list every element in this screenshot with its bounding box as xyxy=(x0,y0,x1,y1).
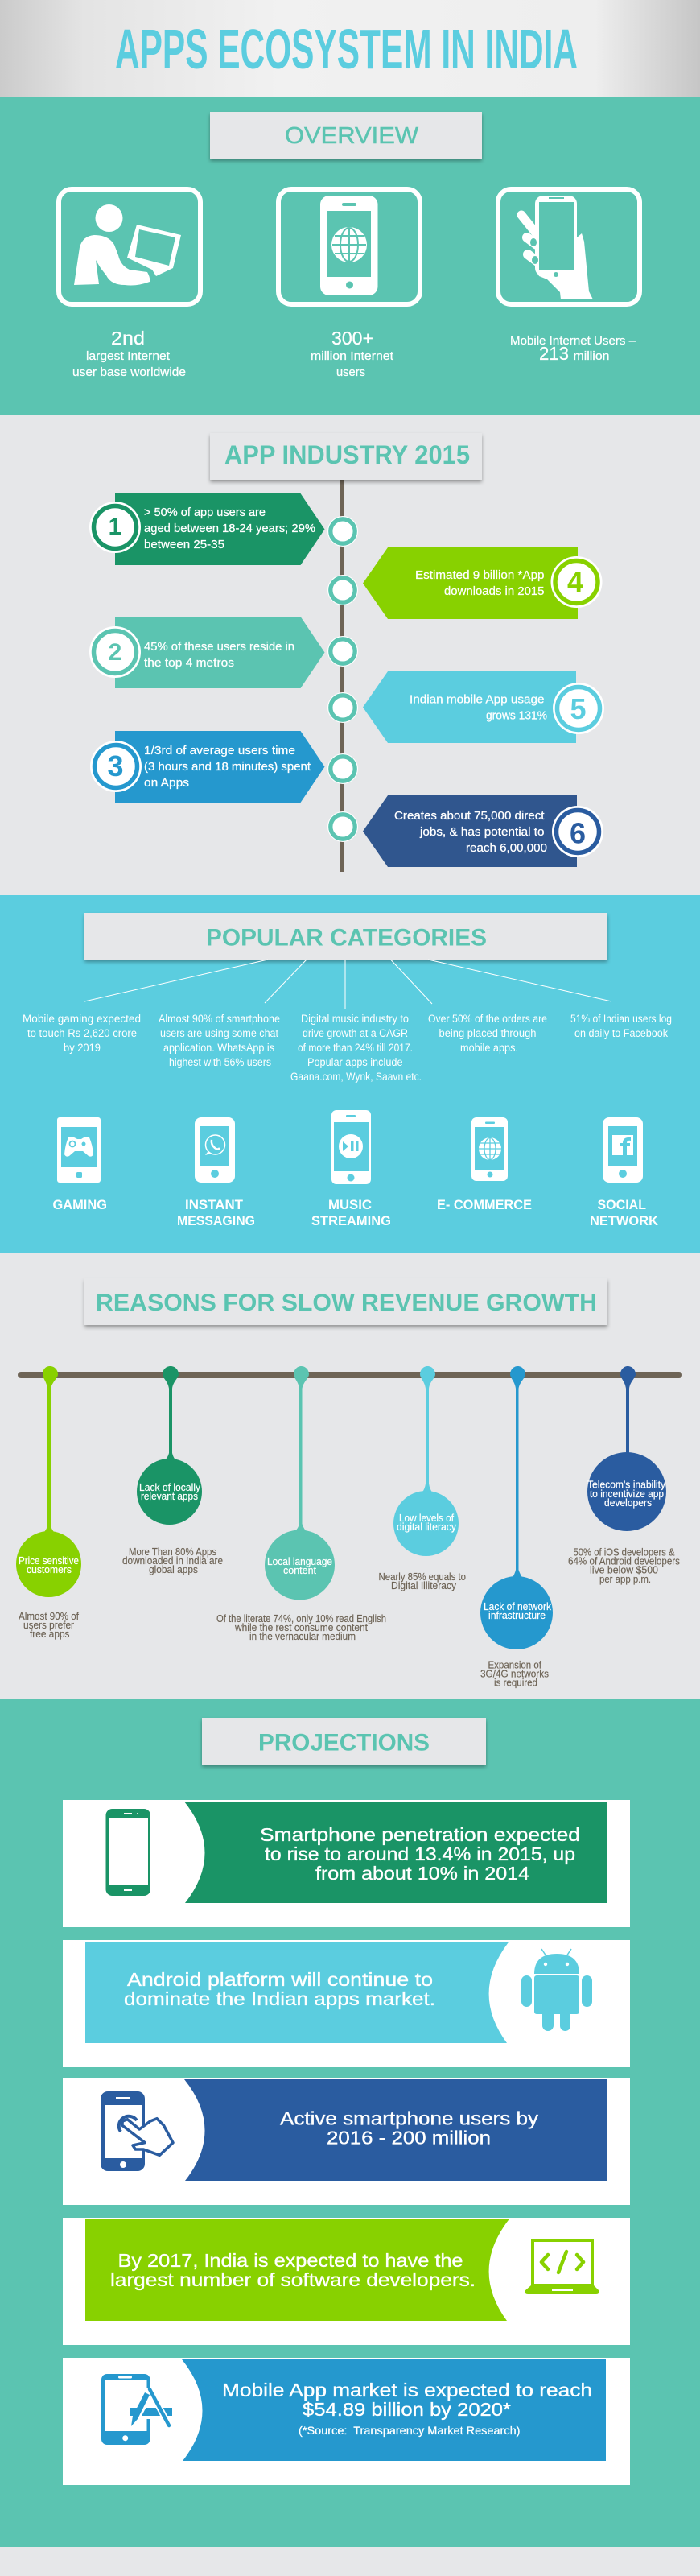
label: instant messaging: INSTANT xyxy=(185,1197,244,1212)
item 2: 2 xyxy=(109,639,121,666)
text: music fact: Gaana.com, Wynk, Saavn etc. xyxy=(290,1071,422,1083)
icon: e-commerce phone xyxy=(471,1117,508,1181)
label: music streaming: MUSIC xyxy=(328,1197,372,1212)
label: e-commerce: E- COMMERCE xyxy=(437,1197,532,1212)
text: 2nd largest xyxy=(72,328,186,379)
card: smartphone penetration: to rise to around 13.4% in 2015, up xyxy=(265,1843,575,1864)
card: smartphone penetration: from about 10% in 2014 xyxy=(315,1863,529,1884)
caption: Almost 90% of xyxy=(19,1611,79,1622)
item 1: between 25-35 xyxy=(144,538,224,551)
heading: overview: OVERVIEW xyxy=(285,123,419,149)
caption xyxy=(19,1611,79,1640)
text: social fact xyxy=(570,1013,672,1039)
card: active smartphone users: 2016 - 200 million xyxy=(327,2127,491,2148)
item 1: 1 xyxy=(109,514,121,540)
caption: More Than 80% Apps xyxy=(129,1546,216,1558)
text: 300+ million: users xyxy=(336,365,365,379)
text: commerce fact: Over 50% of the orders are xyxy=(428,1013,547,1025)
item 6: 6 xyxy=(570,816,586,850)
caption xyxy=(378,1571,466,1591)
text: mobile internet users: 213 xyxy=(539,343,569,364)
icon: person with laptop xyxy=(59,189,200,304)
label: gaming: GAMING xyxy=(53,1197,107,1212)
text: social fact: on daily to Facebook xyxy=(574,1027,668,1039)
card: smartphone penetration: Smartphone penetration expected xyxy=(260,1824,580,1845)
pin: telecom xyxy=(568,1366,680,1585)
caption xyxy=(480,1660,549,1689)
text: commerce fact: mobile apps. xyxy=(460,1042,518,1054)
text: gaming fact: by 2019 xyxy=(64,1042,101,1054)
label: social network xyxy=(590,1197,659,1228)
item 2: 45% of these users reside in xyxy=(144,640,294,654)
text: 2nd largest: user base worldwide xyxy=(72,365,186,379)
item 1: aged between 18-24 years; 29% xyxy=(144,522,315,535)
pin: telecom: Telecom's inability xyxy=(587,1480,666,1491)
pin: network infrastructure: Lack of network xyxy=(484,1601,552,1612)
caption xyxy=(216,1613,386,1642)
timeline spine xyxy=(340,480,344,872)
card: active smartphone users xyxy=(63,2078,630,2205)
text: music fact: drive growth at a CAGR xyxy=(303,1027,408,1039)
panel: reasons for slow revenue growth xyxy=(0,1253,700,1699)
heading: overview xyxy=(210,112,482,159)
text: messaging fact: users are using some chat xyxy=(160,1027,278,1039)
item 4 xyxy=(363,547,602,619)
pin: digital literacy: digital literacy xyxy=(397,1521,457,1533)
text: messaging fact: Almost 90% of smartphone xyxy=(159,1013,280,1025)
item 5: 5 xyxy=(570,692,587,725)
icon: app store on phone xyxy=(101,2374,172,2445)
item 4: Estimated 9 billion *App xyxy=(415,568,544,582)
card: mobile app market xyxy=(63,2358,630,2485)
caption: Expansion of xyxy=(488,1660,541,1671)
text: music fact xyxy=(290,1013,422,1083)
card: software developers: largest number of software developers. xyxy=(110,2269,476,2290)
pin: price sensitive: customers xyxy=(27,1564,72,1575)
heading: reasons: REASONS FOR SLOW REVENUE GROWTH xyxy=(96,1290,597,1316)
caption: free apps xyxy=(30,1629,69,1640)
card: smartphone penetration xyxy=(63,1800,630,1927)
pin: network infrastructure: infrastructure xyxy=(488,1610,546,1621)
text: commerce fact xyxy=(428,1013,547,1054)
card: android: Android platform will continue to xyxy=(127,1969,433,1990)
icon: gaming phone xyxy=(57,1117,101,1183)
item 5: Indian mobile App usage xyxy=(410,692,544,707)
text: gaming fact: to touch Rs 2,620 crore xyxy=(27,1027,137,1039)
pin: local language xyxy=(216,1366,386,1642)
horizontal bar xyxy=(18,1372,682,1378)
item 3: (3 hours and 18 minutes) spent xyxy=(144,760,311,774)
caption xyxy=(568,1547,680,1585)
item 5: grows 131% xyxy=(486,708,547,723)
card: android: dominate the Indian apps market. xyxy=(124,1988,435,2009)
text: commerce fact: being placed through xyxy=(439,1027,536,1039)
caption: 50% of iOS developers & xyxy=(573,1547,675,1558)
text: mobile internet users xyxy=(510,334,636,364)
card: active smartphone users: Active smartphone users by xyxy=(280,2107,539,2128)
icon: messaging phone xyxy=(195,1117,235,1183)
caption: downloaded in India are xyxy=(122,1555,223,1567)
timeline nodes xyxy=(327,516,358,842)
pin: telecom: to incentivize app xyxy=(590,1488,664,1500)
pin: digital literacy: Low levels of xyxy=(399,1513,454,1524)
caption: 64% of Android developers xyxy=(568,1555,680,1567)
panel: popular categories xyxy=(0,895,700,1253)
card: mobile app market: (*Source: Transparency Market Research) xyxy=(299,2424,520,2437)
caption: Nearly 85% equals to xyxy=(378,1571,466,1583)
icon: music phone xyxy=(331,1110,371,1184)
text: mobile internet users: Mobile Internet Users – xyxy=(510,334,636,348)
title band xyxy=(0,0,700,97)
pin: locally relevant: Lack of locally xyxy=(139,1482,201,1493)
text: gaming fact: Mobile gaming expected xyxy=(23,1013,141,1025)
caption: users prefer xyxy=(23,1620,74,1631)
heading: popular categories: POPULAR CATEGORIES xyxy=(206,924,487,952)
label: instant messaging xyxy=(177,1197,255,1228)
label: social network: NETWORK xyxy=(590,1213,659,1228)
caption: per app p.m. xyxy=(599,1574,651,1585)
icon: phone with globe xyxy=(278,189,420,304)
pin: telecom: developers xyxy=(604,1497,652,1509)
item 3: 3 xyxy=(107,749,124,782)
item 5 xyxy=(363,671,604,743)
icon: tapping hand on phone xyxy=(101,2091,173,2171)
item 1 xyxy=(89,493,325,565)
card: mobile app market: Mobile App market is expected to reach xyxy=(222,2380,592,2401)
text: 300+ million xyxy=(311,328,394,379)
pin: price sensitive xyxy=(16,1366,81,1640)
pin: price sensitive: Price sensitive xyxy=(19,1555,79,1567)
text: 300+ million: million Internet xyxy=(311,349,394,363)
icon: android xyxy=(521,1949,592,2031)
caption: in the vernacular medium xyxy=(249,1631,356,1642)
text: mobile internet users: million xyxy=(573,349,610,363)
icon: hand holding phone xyxy=(498,189,640,304)
connector lines xyxy=(84,960,611,1009)
caption xyxy=(122,1546,223,1575)
pin: network infrastructure xyxy=(480,1366,553,1689)
icon: social phone xyxy=(603,1117,643,1183)
panel: app industry 2015 xyxy=(0,415,700,895)
item 4: downloads in 2015 xyxy=(444,584,544,598)
text: messaging fact: highest with 56% users xyxy=(169,1056,271,1068)
text: 300+ million: 300+ xyxy=(331,328,373,349)
pin: locally relevant: relevant apps xyxy=(141,1491,198,1502)
label: instant messaging: MESSAGING xyxy=(177,1213,255,1228)
heading: app industry xyxy=(210,433,482,480)
caption: global apps xyxy=(149,1564,198,1575)
text: 2nd largest: 2nd xyxy=(111,328,145,349)
caption: live below $500 xyxy=(590,1565,658,1576)
card: software developers xyxy=(63,2218,630,2345)
caption: while the rest consume content xyxy=(234,1622,368,1633)
text: gaming fact xyxy=(23,1013,141,1054)
item 6 xyxy=(363,795,603,867)
text: messaging fact: application. WhatsApp is xyxy=(163,1042,274,1054)
item 3: 1/3rd of average users time xyxy=(144,744,295,758)
caption: is required xyxy=(494,1678,537,1689)
item 6: jobs, & has potential to xyxy=(419,825,544,839)
item 2: the top 4 metros xyxy=(144,656,234,670)
caption: Digital Illiteracy xyxy=(391,1580,457,1591)
pin: locally relevant xyxy=(122,1366,223,1575)
item 3: on Apps xyxy=(144,776,189,790)
item 2 xyxy=(89,617,325,688)
heading: reasons xyxy=(84,1278,607,1325)
label: music streaming xyxy=(311,1197,391,1228)
caption: 3G/4G networks xyxy=(480,1668,549,1679)
caption: Of the literate 74%, only 10% read English xyxy=(216,1613,386,1624)
label: social network: SOCIAL xyxy=(597,1197,646,1212)
card: mobile app market: $54.89 billion by 2020* xyxy=(303,2399,511,2420)
pin: digital literacy xyxy=(378,1366,466,1591)
heading: popular categories xyxy=(84,913,607,960)
panel: projections xyxy=(0,1699,700,2547)
item 1: > 50% of app users are xyxy=(144,506,266,519)
item 3 xyxy=(90,731,325,803)
item 6: Creates about 75,000 direct xyxy=(394,809,545,823)
text: messaging fact xyxy=(159,1013,280,1068)
text: music fact: Popular apps include xyxy=(307,1056,402,1068)
card: software developers: By 2017, India is expected to have the xyxy=(117,2250,463,2271)
heading: projections: PROJECTIONS xyxy=(258,1729,430,1757)
item 6: reach 6,00,000 xyxy=(466,841,547,855)
icon: laptop with code xyxy=(525,2240,599,2294)
pin: local language: content xyxy=(283,1565,317,1576)
heading: projections xyxy=(202,1718,486,1765)
text: 2nd largest: largest Internet xyxy=(86,349,171,363)
pin: local language: Local language xyxy=(267,1556,332,1567)
item 4: 4 xyxy=(567,565,583,598)
icon: smartphone xyxy=(106,1809,150,1896)
text: music fact: of more than 24% till 2017. xyxy=(298,1042,413,1054)
text: social fact: 51% of Indian users log xyxy=(570,1013,672,1025)
panel: overview xyxy=(0,97,700,415)
card: android xyxy=(63,1940,630,2067)
text: music fact: Digital music industry to xyxy=(301,1013,409,1025)
label: music streaming: STREAMING xyxy=(311,1213,391,1228)
heading: app industry: APP INDUSTRY 2015 xyxy=(224,440,470,469)
